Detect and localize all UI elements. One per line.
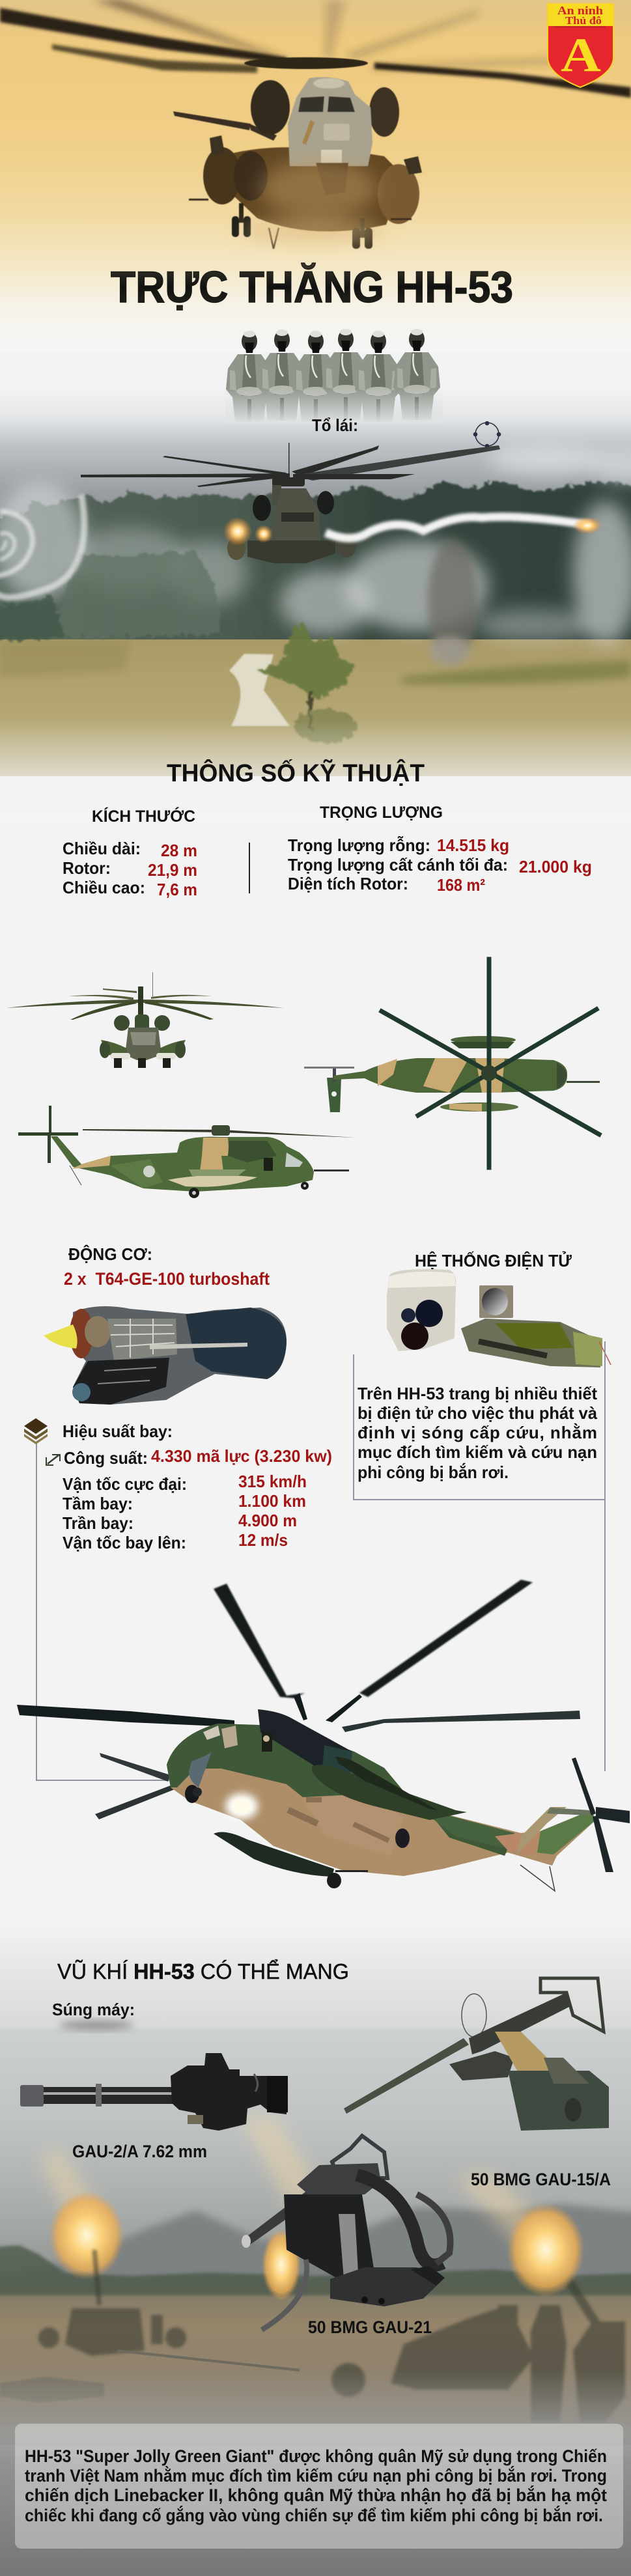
weight table: Trọng lượng cất cánh tối đa: (288, 855, 508, 875)
electronics description box (354, 1341, 605, 1771)
helicopter side view (18, 1106, 356, 1198)
dimensions table: 21,9 m (148, 860, 197, 880)
divider (249, 843, 250, 893)
gun label GAU-21: 50 BMG GAU-21 (308, 2317, 432, 2337)
engine heading: ĐỘNG CƠ: (68, 1244, 152, 1264)
newspaper logo: Thủ đô (565, 14, 602, 27)
weight table: 14.515 kg (437, 835, 509, 855)
title: TRỰC THĂNG HH-53 (111, 262, 513, 312)
performance table: Tầm bay: (63, 1494, 133, 1513)
dimensions table: Rotor: (63, 858, 111, 878)
photo: flares over forest (0, 387, 631, 837)
performance table: Trần bay: (63, 1513, 133, 1533)
performance heading: Hiệu suất bay: (63, 1421, 173, 1441)
power row: Công suất: (64, 1448, 148, 1468)
performance table: 4.900 m (238, 1511, 297, 1530)
dimensions table: Chiều dài: (63, 839, 141, 858)
weapons heading: VŨ KHÍ HH-53 CÓ THỂ MANG (57, 1959, 349, 1983)
weight table: TRỌNG LƯỢNG (320, 804, 443, 822)
performance table (63, 1472, 307, 1552)
summary panel (15, 2424, 623, 2549)
power row: 4.330 mã lực (3.230 kw) (151, 1446, 332, 1466)
performance table: 315 km/h (238, 1472, 307, 1491)
engine image (44, 1306, 287, 1405)
performance frame line (36, 1442, 171, 1780)
gun: 50 BMG GAU-15/A (344, 1978, 609, 2131)
dimensions table: KÍCH THƯỚC (92, 806, 195, 826)
machine gun subheading: Súng máy: (52, 2000, 135, 2019)
engine model: 2 x T64-GE-100 turboshaft (64, 1269, 270, 1289)
dimensions table (63, 806, 197, 899)
crew pilots (225, 329, 443, 423)
machine gun subheading (52, 2000, 135, 2030)
dimensions table: 7,6 m (157, 880, 197, 899)
electronics: control unit (461, 1285, 611, 1367)
dimensions table: 28 m (161, 841, 197, 860)
helicopter firing flares (81, 443, 602, 563)
large helicopter photo (17, 1580, 630, 1891)
performance table: Vận tốc bay lên: (63, 1533, 186, 1552)
gun: 50 BMG GAU-21 (242, 2136, 450, 2330)
gun: GAU-2/A minigun (20, 2053, 288, 2131)
icon: diamond layers (24, 1418, 48, 1444)
gun label GAU-15/A: 50 BMG GAU-15/A (471, 2170, 611, 2189)
summary panel: chiến dịch Linebacker II, không quân Mỹ thừa nhận họ đã bị bắn hạ một (25, 2485, 607, 2505)
electronics description box: định vị sóng cấp cứu, nhằm (358, 1423, 597, 1442)
weight table: Diện tích Rotor: (288, 874, 408, 893)
header helicopter photo (0, 0, 631, 249)
performance table: 1.100 km (238, 1491, 306, 1511)
decorative ring (474, 422, 500, 448)
performance table: Vận tốc cực đại: (63, 1474, 187, 1494)
weapons section background (0, 1921, 631, 2576)
weight table: 168 m² (437, 875, 485, 895)
electronics: sensor turret (387, 1269, 456, 1351)
weight table (288, 804, 592, 895)
header sunset background (0, 0, 631, 352)
newspaper logo: A (561, 29, 601, 82)
crew label: Tổ lái: (312, 415, 358, 435)
weight table: 21.000 kg (519, 857, 592, 876)
weight table: Trọng lượng rỗng: (288, 835, 430, 855)
newspaper logo: An ninh (557, 4, 603, 17)
electronics heading: HỆ THỐNG ĐIỆN TỬ (415, 1250, 572, 1270)
gun label GAU-2/A: GAU-2/A 7.62 mm (72, 2142, 207, 2161)
electronics description box: bị điện tử cho việc thu phát và (358, 1403, 598, 1423)
electronics description box: mục đích tìm kiếm và cứu nạn (358, 1442, 597, 1462)
helicopter top view (304, 959, 600, 1168)
icon: expand arrow (46, 1455, 60, 1465)
newspaper logo (548, 4, 613, 87)
helicopter front view (6, 972, 284, 1068)
electronics description box: Trên HH-53 trang bị nhiều thiết (358, 1384, 597, 1403)
power row (64, 1446, 332, 1468)
performance table: 12 m/s (238, 1530, 288, 1550)
electronics description box: phi công bị bắn rơi. (358, 1463, 509, 1482)
section heading: technical specs: THÔNG SỐ KỸ THUẬT (167, 758, 425, 787)
dimensions table: Chiều cao: (63, 878, 145, 897)
